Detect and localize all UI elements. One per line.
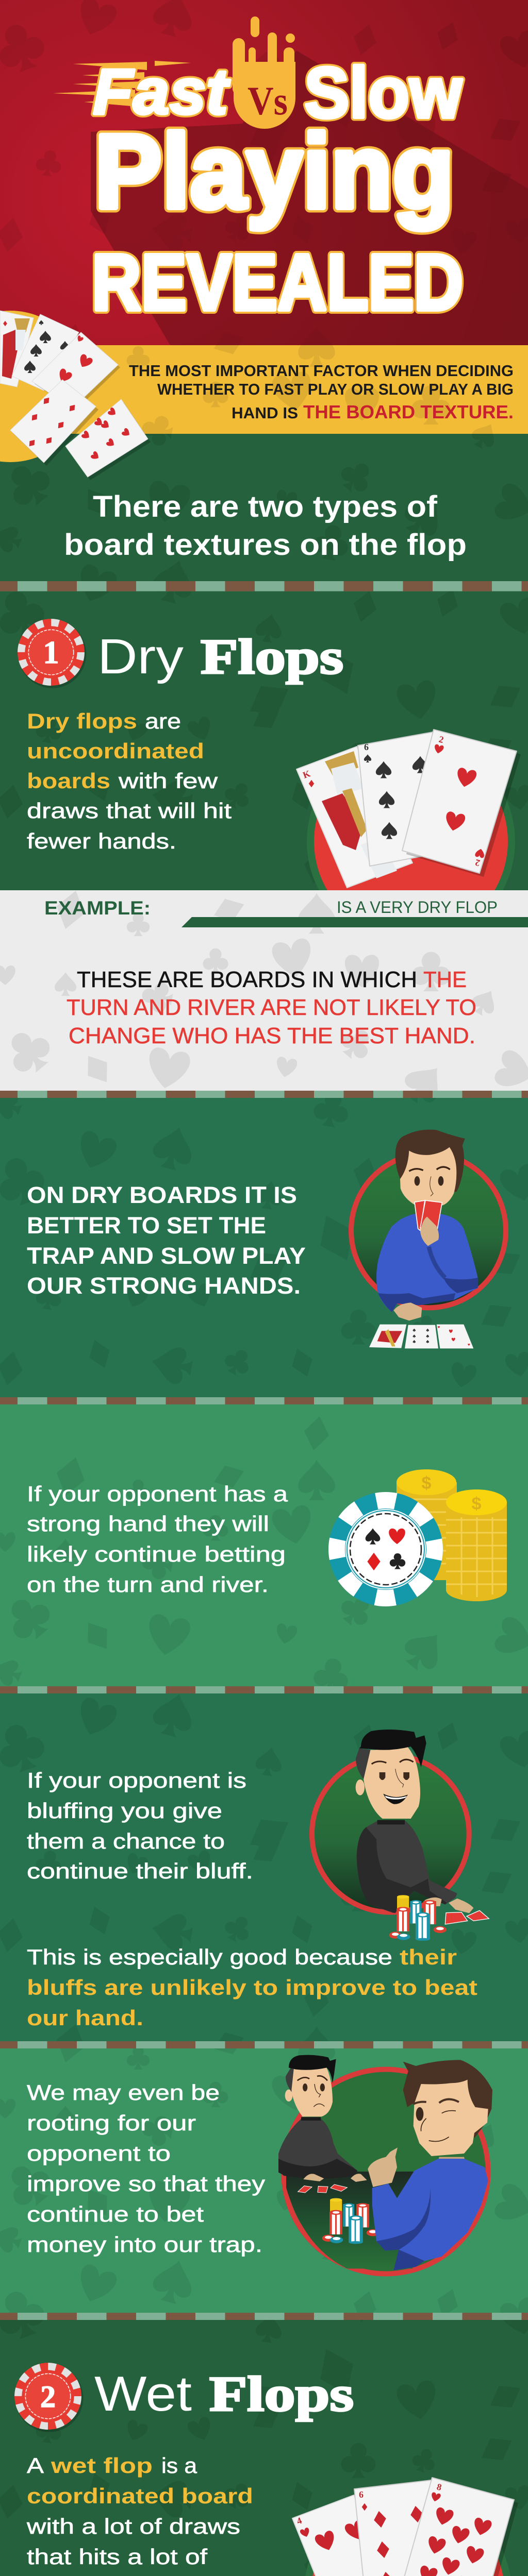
text block: dry flop definition: fewer hands. [27, 829, 176, 853]
text block: opponent bluffing: bluffing you give [27, 1799, 222, 1823]
coin stacks: $ [472, 1494, 482, 1514]
text block: rooting for opponent: rooting for our [27, 2111, 196, 2135]
text block: strong hand keeps betting [27, 1482, 288, 1597]
chip [328, 1492, 443, 1606]
four of hearts: 4 [295, 2515, 303, 2527]
K of diamonds [0, 311, 34, 387]
text block: bluffs unlikely to improve: our hand. [27, 2006, 143, 2030]
icon: chip number 1: 1 [43, 635, 59, 670]
opponent body [278, 2119, 357, 2176]
text block: on dry boards: TRAP AND SLOW PLAY [27, 1243, 306, 1269]
text block: wet flop definition: that hits a lot of [27, 2545, 207, 2569]
winking player [438, 2157, 465, 2160]
text block: dry flop definition [27, 709, 232, 853]
icon: hero card fan [0, 311, 151, 480]
text block: dry flop definition: with few [118, 769, 218, 793]
heading: Dry Flops [18, 619, 343, 688]
Vs badge [233, 16, 295, 129]
Playing: Playing [94, 113, 454, 230]
text block: dry flop definition: boards [27, 769, 110, 793]
heading: Dry Flops: Flops [201, 629, 343, 684]
text block: dry flop definition: Dry flops [27, 709, 137, 733]
six of spades: 6 [364, 742, 369, 752]
heading: Wet Flops: Wet [94, 2366, 192, 2421]
icon: chip number 2 [14, 2363, 83, 2432]
text block: strong hand keeps betting: on the turn and river. [27, 1572, 269, 1597]
heading: Dry Flops: Dry [97, 629, 184, 684]
coin stacks: $ [422, 1473, 432, 1493]
eight of hearts [398, 2478, 518, 2576]
text block: bluffs unlikely to improve: their [400, 1945, 457, 1969]
callout: dry boards explanation: CHANGE WHO HAS THE BEST HAND. [69, 1023, 475, 1048]
callout: dry boards explanation: THESE ARE BOARDS IN WHICH [77, 967, 417, 992]
title: Vs [248, 78, 288, 123]
text block: on dry boards: BETTER TO SET THE [27, 1212, 266, 1239]
text block: bluffs unlikely to improve: This is especially good because [27, 1945, 392, 1969]
text block: bluffs unlikely to improve [27, 1945, 477, 2030]
text block: wet flop definition: coordinated board [27, 2484, 253, 2508]
icon: gold circle behind hero cards [0, 311, 86, 462]
two of hearts: 2 [438, 734, 445, 745]
text block: rooting for opponent: We may even be [27, 2080, 220, 2105]
text block: opponent bluffing: continue their bluff. [27, 1859, 253, 1883]
example row: dry flop: IS A VERY DRY FLOP [337, 898, 498, 917]
2 of hearts [32, 332, 120, 411]
two of hearts: 2 [474, 857, 481, 869]
text block: opponent bluffing [27, 1768, 253, 1883]
eight of hearts: 8 [436, 2481, 443, 2493]
six of spades [358, 732, 444, 866]
text block: dry flop definition: uncoordinated [27, 739, 204, 763]
heading: two types of board textures: There are two types of [93, 490, 438, 523]
coin stacks [397, 1469, 507, 1601]
REVEALED: REVEALED [92, 238, 463, 327]
callout: dry boards explanation: TURN AND RIVER ARE NOT LIKELY TO [67, 995, 476, 1020]
six of diamonds: 6 [359, 2489, 364, 2500]
title: REVEALED [92, 238, 463, 327]
king of diamonds [296, 747, 412, 888]
text block: on dry boards [27, 1182, 306, 1299]
title: Slow [304, 52, 463, 133]
text block: rooting for opponent: improve so that they [27, 2172, 265, 2196]
text block: bluffs unlikely to improve: bluffs are unlikely to improve to beat [27, 1975, 477, 1999]
icon: smiling opponent with chips [312, 1730, 489, 1941]
title [53, 16, 463, 327]
icon: chip number 1 [18, 619, 86, 688]
text block: opponent bluffing: them a chance to [27, 1829, 225, 1853]
icon: winking player and sad opponent [278, 2055, 492, 2274]
text block: on dry boards: ON DRY BOARDS IT IS [27, 1182, 297, 1208]
text block: rooting for opponent: money into our trap. [27, 2232, 262, 2257]
title: Playing [94, 113, 454, 230]
text block: on dry boards: OUR STRONG HANDS. [27, 1273, 301, 1299]
icon: player hiding behind cards [351, 1130, 506, 1348]
Slow: Slow [304, 52, 463, 133]
four of hearts [292, 2495, 409, 2576]
text block: wet flop definition: A [27, 2453, 44, 2478]
example row: dry flop [44, 897, 528, 927]
heading: Wet Flops: Flops [209, 2366, 354, 2421]
heading: two types of board textures: board textures on the flop [64, 528, 467, 562]
text block: wet flop definition: wet flop [51, 2453, 153, 2478]
speed lines [53, 61, 191, 106]
text block: opponent bluffing: If your opponent is [27, 1768, 246, 1792]
text block: strong hand keeps betting: If your opponent has a [27, 1482, 288, 1506]
6 of diamonds [10, 380, 98, 466]
text block: wet flop definition: with a lot of draws [26, 2514, 240, 2538]
text block: rooting for opponent [27, 2080, 265, 2257]
text block: board texture intro: THE MOST IMPORTANT FACTOR WHEN DECIDING [129, 362, 514, 380]
king of diamonds: K [302, 768, 312, 781]
icon: chip number 2: 2 [40, 2380, 56, 2414]
text block: wet flop definition [26, 2453, 253, 2576]
text block: strong hand keeps betting: strong hand they will [27, 1512, 269, 1536]
text block: dry flop definition: draws that will hit [27, 799, 232, 823]
text block: board texture intro: HAND IS [232, 404, 298, 422]
text block: wet flop definition: is a [161, 2453, 197, 2478]
callout: dry boards explanation [67, 967, 476, 1048]
text block: board texture intro: THE BOARD TEXTURE. [303, 401, 514, 422]
text block: board texture intro [129, 362, 514, 422]
text block: strong hand keeps betting: likely continue betting [27, 1542, 286, 1566]
9 of hearts [65, 399, 151, 480]
heading: Wet Flops [14, 2363, 354, 2432]
text block: rooting for opponent: continue to bet [27, 2202, 204, 2226]
6 of spades [12, 314, 79, 391]
text block: rooting for opponent: opponent to [27, 2141, 171, 2165]
example row: dry flop: EXAMPLE: [44, 897, 151, 919]
six of diamonds [354, 2480, 441, 2576]
text block: dry flop definition: are [145, 709, 181, 733]
icon: dry flop cards on red circle [296, 729, 521, 890]
text block: board texture intro: WHETHER TO FAST PLAY OR SLOW PLAY A BIG [157, 380, 514, 398]
icon: gold coins and teal chip [328, 1469, 507, 1606]
title: Fast [93, 56, 230, 128]
Fast: Fast [93, 56, 230, 128]
callout: dry boards explanation: THE [423, 967, 467, 992]
icon: wet flop cards on red circle [292, 2478, 518, 2576]
heading: two types of board textures [64, 490, 467, 562]
two of hearts [402, 730, 521, 877]
table cards [369, 1325, 473, 1348]
title long shadow [91, 50, 528, 345]
